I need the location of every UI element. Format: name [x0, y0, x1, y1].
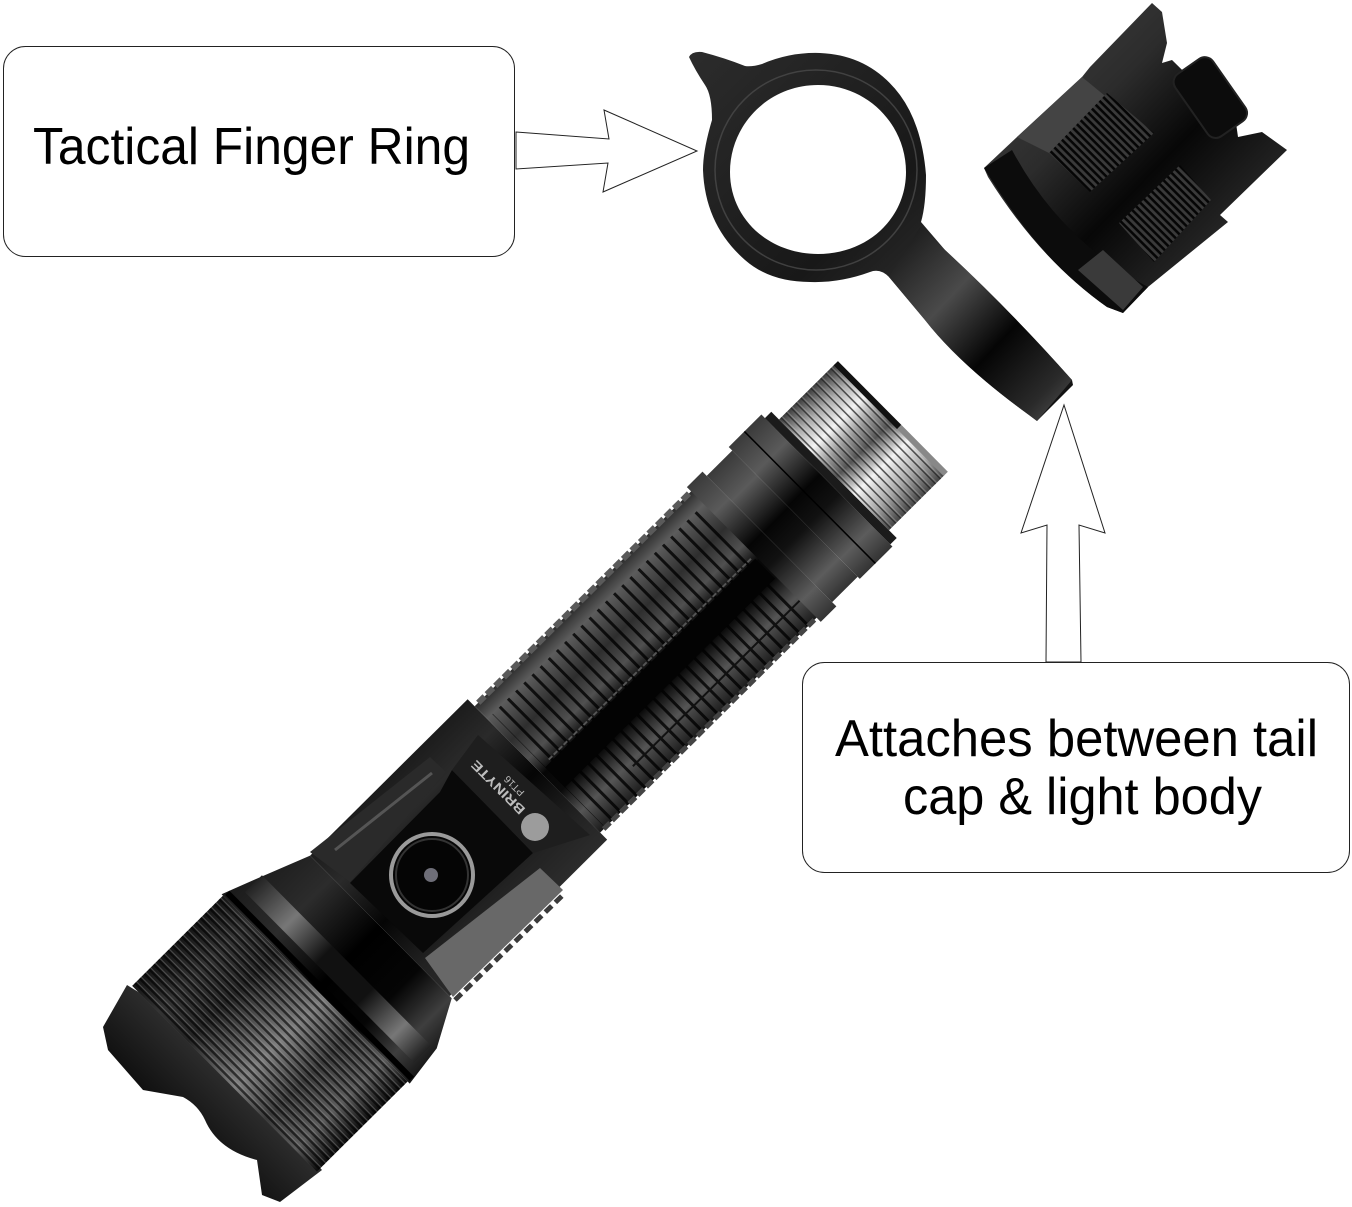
switch housing — [310, 699, 607, 996]
arrow: callout to finger ring — [516, 110, 697, 192]
head neck — [222, 831, 474, 1084]
label face — [452, 735, 590, 853]
cap knurl patch lower — [1119, 165, 1211, 262]
body collar — [687, 414, 895, 622]
tail switch button — [1170, 53, 1251, 142]
bottom rail — [425, 868, 565, 1000]
threads — [765, 353, 956, 544]
cap grey face — [1017, 77, 1110, 153]
callout: attachment position: Attaches between tail — [835, 710, 1318, 768]
cap knurl patch upper — [1049, 93, 1154, 192]
top rail — [310, 757, 446, 882]
finger ring — [689, 52, 1073, 421]
grip — [475, 491, 817, 833]
logo mark — [521, 813, 549, 841]
ring strap — [889, 226, 1072, 421]
arrow: callout to ring attachment — [1021, 405, 1105, 662]
flashlight — [103, 321, 987, 1202]
head knurl — [132, 896, 408, 1172]
tail cap — [984, 3, 1287, 313]
cap rim — [984, 150, 1148, 313]
callout: tactical finger ring: Tactical Finger Ring — [33, 118, 470, 176]
brand text: BRINYTE — [468, 757, 528, 817]
ring inner edge highlight — [715, 70, 917, 270]
flashlight body sections — [131, 321, 987, 1174]
callout: attachment position: cap & light body — [903, 768, 1262, 826]
callout: attachment position — [802, 662, 1350, 872]
cap lower grey face — [1078, 250, 1143, 310]
flat switch face — [350, 770, 533, 953]
callout: tactical finger ring — [4, 46, 514, 256]
model text: PT16 — [502, 773, 527, 798]
power switch — [391, 834, 473, 916]
flashlight bezel — [103, 985, 322, 1202]
